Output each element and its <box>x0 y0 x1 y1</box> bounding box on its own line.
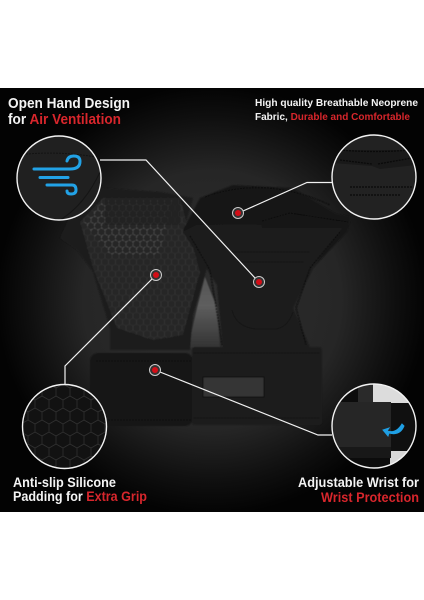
heading: anti-slip silicone: Padding for Extra Grip <box>13 489 147 504</box>
marker: fabric <box>232 208 244 218</box>
heading: anti-slip silicone: Anti-slip Silicone <box>13 475 116 490</box>
infographic canvas <box>0 88 424 512</box>
finger loops <box>215 207 262 225</box>
gap between gloves <box>188 277 220 348</box>
inset circle: wrist strap <box>332 384 416 468</box>
inset circle: silicone hex padding <box>22 384 107 469</box>
callout lines <box>65 160 332 435</box>
silicone palm pattern <box>80 198 200 340</box>
heading: adjustable wrist: Wrist Protection <box>321 490 419 505</box>
heading: open hand design: Open Hand Design <box>8 96 130 112</box>
icon: blue arrow <box>383 424 404 436</box>
left wrist strap <box>90 353 193 426</box>
background panel <box>0 88 424 512</box>
right glove <box>183 185 350 348</box>
right wrist strap <box>192 347 322 425</box>
heading: adjustable wrist: Adjustable Wrist for <box>298 475 420 490</box>
heading: breathable neoprene: High quality Breathable Neoprene <box>255 97 418 109</box>
heading: breathable neoprene: Fabric, Durable and Comfortable <box>255 111 410 123</box>
icon: wind <box>34 156 80 194</box>
heading: open hand design: for Air Ventilation <box>8 112 121 128</box>
heading: breathable neoprene <box>255 97 418 123</box>
marker: silicone <box>150 270 162 280</box>
left glove <box>60 188 207 350</box>
inset circle: air ventilation <box>17 136 101 220</box>
heading: adjustable wrist <box>298 475 420 505</box>
heading: anti-slip silicone <box>13 475 147 504</box>
marker: ventilation <box>254 276 264 288</box>
velcro label <box>203 377 264 397</box>
gloves product photo <box>60 185 350 426</box>
inset circle: neoprene fabric <box>332 135 416 219</box>
marker: wrist <box>150 364 160 376</box>
heading: open hand design <box>8 96 130 128</box>
